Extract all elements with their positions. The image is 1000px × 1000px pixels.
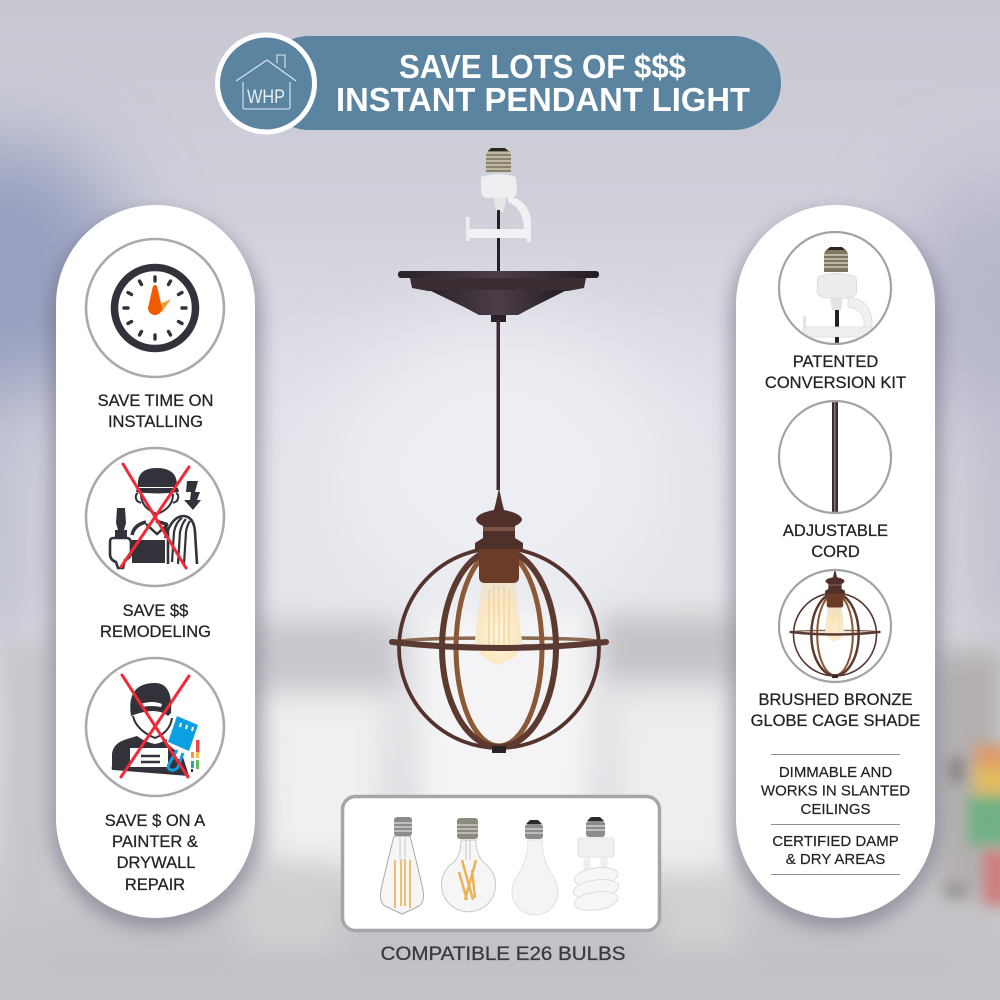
label: adjustable cord: ADJUSTABLE xyxy=(783,522,888,540)
title: INSTANT PENDANT LIGHT xyxy=(336,82,751,119)
product: pendant light xyxy=(392,148,606,753)
icon: electrician crossed out xyxy=(86,448,224,586)
feature: conversion kit xyxy=(765,232,906,392)
panel: right features xyxy=(736,205,935,918)
feature: adjustable cord xyxy=(779,400,891,561)
bulb: filament A xyxy=(442,818,496,912)
benefit: save painter xyxy=(86,658,224,894)
label: save remodeling: REMODELING xyxy=(100,623,211,641)
header banner xyxy=(218,35,781,132)
label: save time on installing: SAVE TIME ON xyxy=(98,392,213,410)
label: save time on installing: INSTALLING xyxy=(108,413,203,431)
label: save on painter and drywall repair: SAVE $ ON A xyxy=(105,812,205,830)
feature: globe cage shade xyxy=(751,568,920,730)
label: save remodeling: SAVE $$ xyxy=(123,602,188,620)
text: dimmable: WORKS IN SLANTED xyxy=(761,782,910,800)
label: patented conversion kit: CONVERSION KIT xyxy=(765,374,906,392)
panel: right features shadow xyxy=(730,212,942,928)
banner pill xyxy=(262,36,781,130)
feature list: dimmable and certified xyxy=(761,754,910,874)
label: patented conversion kit: PATENTED xyxy=(793,353,878,371)
bulb: filament ST xyxy=(380,817,424,914)
icon: cord photo xyxy=(779,400,891,515)
panel: left benefits shadow xyxy=(50,212,262,928)
label: save on painter and drywall repair: PAINTER & xyxy=(112,833,198,851)
icon: clock xyxy=(86,239,224,377)
cord xyxy=(496,320,500,490)
icon: globe shade photo xyxy=(779,568,891,682)
benefit: save time xyxy=(86,239,224,431)
label: save on painter and drywall repair: REPAIR xyxy=(125,876,185,894)
text: certified: & DRY AREAS xyxy=(786,851,885,868)
icon: conversion kit photo xyxy=(779,232,891,345)
bulb: frosted xyxy=(512,820,558,915)
logo: WHP house xyxy=(218,35,314,132)
title: SAVE LOTS OF $$$ xyxy=(399,49,686,86)
icon: painter crossed out xyxy=(86,658,224,796)
text: dimmable: CEILINGS xyxy=(800,801,871,818)
benefit: save remodeling xyxy=(86,448,224,641)
logo: WHP house: WHP xyxy=(247,87,285,108)
panel: compatible bulbs xyxy=(342,796,660,930)
canopy xyxy=(398,271,599,322)
conversion kit xyxy=(466,148,531,272)
label: adjustable cord: CORD xyxy=(811,543,860,561)
text: certified: CERTIFIED DAMP xyxy=(772,833,899,850)
caption: compatible E26 bulbs: COMPATIBLE E26 BULBS xyxy=(380,943,626,965)
text: dimmable: DIMMABLE AND xyxy=(779,764,892,781)
globe cage shade xyxy=(392,488,606,753)
label: brushed bronze globe cage shade: GLOBE CAGE SHADE xyxy=(751,712,920,730)
label: save on painter and drywall repair: DRYWALL xyxy=(117,854,195,872)
label: brushed bronze globe cage shade: BRUSHED BRONZE xyxy=(758,691,913,709)
panel: left benefits xyxy=(56,205,255,918)
bulb: CFL spiral xyxy=(572,817,620,913)
